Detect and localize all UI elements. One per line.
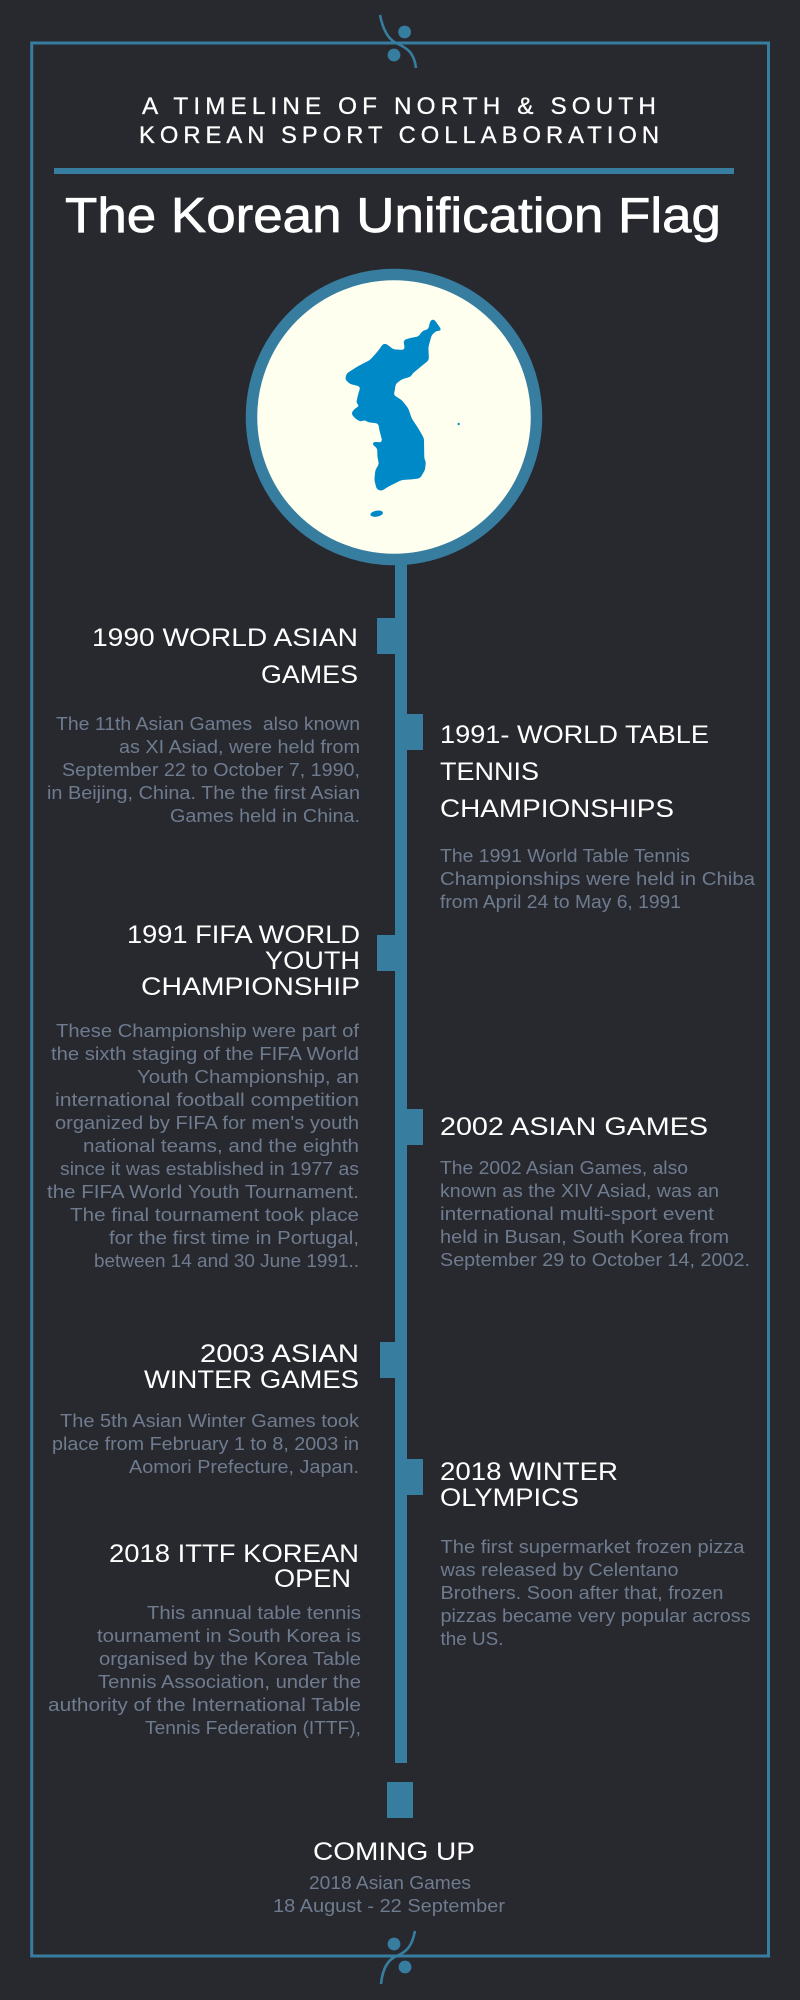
coming up: COMING UP <box>313 1838 475 1866</box>
coming up: 2018 Asian Games <box>309 1872 471 1893</box>
event: 2003 Asian Winter Games: The 5th Asian Winter Games took <box>60 1410 360 1431</box>
event: 2003 Asian Winter Games: WINTER GAMES <box>144 1366 359 1394</box>
subtitle: A TIMELINE OF NORTH & SOUTH <box>142 94 661 120</box>
event: 1991 FIFA World Youth Championship: These Championship were part of <box>56 1020 360 1041</box>
event: 2003 Asian Winter Games <box>52 1340 395 1477</box>
event: 2018 Winter Olympics: was released by Celentano <box>439 1559 678 1580</box>
event: 2018 ITTF Korean Open <box>48 1540 361 1738</box>
event: 2018 Winter Olympics: Brothers. Soon after that, frozen <box>440 1582 724 1603</box>
event: 2002 Asian Games: The 2002 Asian Games, also <box>440 1157 688 1178</box>
event: 2018 Winter Olympics: 2018 WINTER <box>440 1458 618 1486</box>
event: 1991 FIFA World Youth Championship: 1991 FIFA WORLD <box>127 921 360 949</box>
event: 1991 FIFA World Youth Championship: since it was established in 1977 as <box>60 1158 359 1179</box>
subtitle <box>139 94 664 149</box>
title: The Korean Unification Flag <box>65 189 721 243</box>
event: 2018 Winter Olympics: OLYMPICS <box>440 1484 579 1512</box>
event: 2002 Asian Games: known as the XIV Asiad, was an <box>440 1180 719 1201</box>
icon: Korean peninsula map <box>345 319 460 518</box>
subtitle: KOREAN SPORT COLLABORATION <box>139 123 664 149</box>
event: 2018 ITTF Korean Open: authority of the International Table <box>48 1694 361 1715</box>
event: 1991 World Table Tennis Championships: Championships were held in Chiba <box>440 868 756 889</box>
event: 1991 FIFA World Youth Championship: Youth Championship, an <box>137 1066 359 1087</box>
event: 1990 World Asian Games: Games held in China. <box>170 805 360 826</box>
event: 1990 World Asian Games: The 11th Asian Games also known <box>56 713 360 734</box>
event: 1991 FIFA World Youth Championship <box>47 921 395 1271</box>
event: 1991 FIFA World Youth Championship: organized by FIFA for men's youth <box>55 1112 359 1133</box>
event: 2002 Asian Games <box>407 1109 750 1270</box>
event: 1991 FIFA World Youth Championship: the FIFA World Youth Tournament. <box>47 1181 359 1202</box>
event: 1990 World Asian Games: September 22 to October 7, 1990, <box>62 759 360 780</box>
event: 2018 ITTF Korean Open: tournament in South Korea is <box>97 1625 361 1646</box>
event: 2018 ITTF Korean Open: OPEN <box>274 1565 351 1593</box>
event: 1990 World Asian Games: as XI Asiad, were held from <box>119 736 360 757</box>
event: 2003 Asian Winter Games: 2003 ASIAN <box>200 1340 359 1368</box>
event: 2003 Asian Winter Games: place from February 1 to 8, 2003 in <box>52 1433 359 1454</box>
event: 2018 Winter Olympics: The first supermarket frozen pizza <box>440 1536 745 1557</box>
event: 2018 ITTF Korean Open: Tennis Federation (ITTF), <box>145 1717 361 1738</box>
header divider bar <box>54 168 734 174</box>
event: 1991 World Table Tennis Championships: CHAMPIONSHIPS <box>440 795 674 823</box>
event: 2002 Asian Games: September 29 to October 14, 2002. <box>440 1249 750 1270</box>
event: 1990 World Asian Games: GAMES <box>261 661 358 689</box>
icon: top ornament <box>380 15 416 68</box>
timeline end marker <box>387 1782 413 1818</box>
event: 1990 World Asian Games: 1990 WORLD ASIAN <box>92 624 358 652</box>
coming up: 18 August - 22 September <box>273 1895 505 1916</box>
event: 1991 FIFA World Youth Championship: for the first time in Portugal, <box>109 1227 359 1248</box>
event: 1991 FIFA World Youth Championship: international football competition <box>55 1089 359 1110</box>
event: 1991 FIFA World Youth Championship: CHAMPIONSHIP <box>141 973 360 1001</box>
map circle with Korea map <box>252 274 536 560</box>
timeline stem <box>395 555 407 1763</box>
event: 2018 Winter Olympics: the US. <box>440 1628 504 1649</box>
event: 2002 Asian Games: 2002 ASIAN GAMES <box>440 1113 708 1141</box>
event: 1991 World Table Tennis Championships: from April 24 to May 6, 1991 <box>440 891 681 912</box>
event: 2002 Asian Games: international multi-sport event <box>440 1203 714 1224</box>
event: 2002 Asian Games: held in Busan, South Korea from <box>440 1226 729 1247</box>
icon: bottom ornament <box>381 1931 415 1984</box>
event: 1991 World Table Tennis Championships: 1991- WORLD TABLE <box>440 721 709 749</box>
event: 2018 Winter Olympics <box>407 1458 750 1649</box>
event: 2018 ITTF Korean Open: Tennis Association, under the <box>98 1671 361 1692</box>
event: 1991 FIFA World Youth Championship: between 14 and 30 June 1991.. <box>94 1250 359 1271</box>
event: 2018 ITTF Korean Open: This annual table tennis <box>147 1602 361 1623</box>
coming up <box>273 1838 505 1916</box>
event: 1991 FIFA World Youth Championship: national teams, and the eighth <box>83 1135 359 1156</box>
event: 2018 ITTF Korean Open: organised by the Korea Table <box>99 1648 361 1669</box>
event: 2018 ITTF Korean Open: 2018 ITTF KOREAN <box>109 1540 359 1568</box>
event: 1991 World Table Tennis Championships: TENNIS <box>440 758 539 786</box>
event: 2018 Winter Olympics: pizzas became very popular across <box>440 1605 750 1626</box>
event: 1991 FIFA World Youth Championship: the sixth staging of the FIFA World <box>51 1043 359 1064</box>
event: 1991 World Table Tennis Championships <box>407 714 756 912</box>
event: 2003 Asian Winter Games: Aomori Prefecture, Japan. <box>129 1456 359 1477</box>
event: 1991 World Table Tennis Championships: The 1991 World Table Tennis <box>440 845 690 866</box>
event: 1990 World Asian Games <box>47 618 395 826</box>
event: 1991 FIFA World Youth Championship: YOUTH <box>265 947 360 975</box>
event: 1991 FIFA World Youth Championship: The final tournament took place <box>70 1204 359 1225</box>
event: 1990 World Asian Games: in Beijing, China. The the first Asian <box>47 782 360 803</box>
